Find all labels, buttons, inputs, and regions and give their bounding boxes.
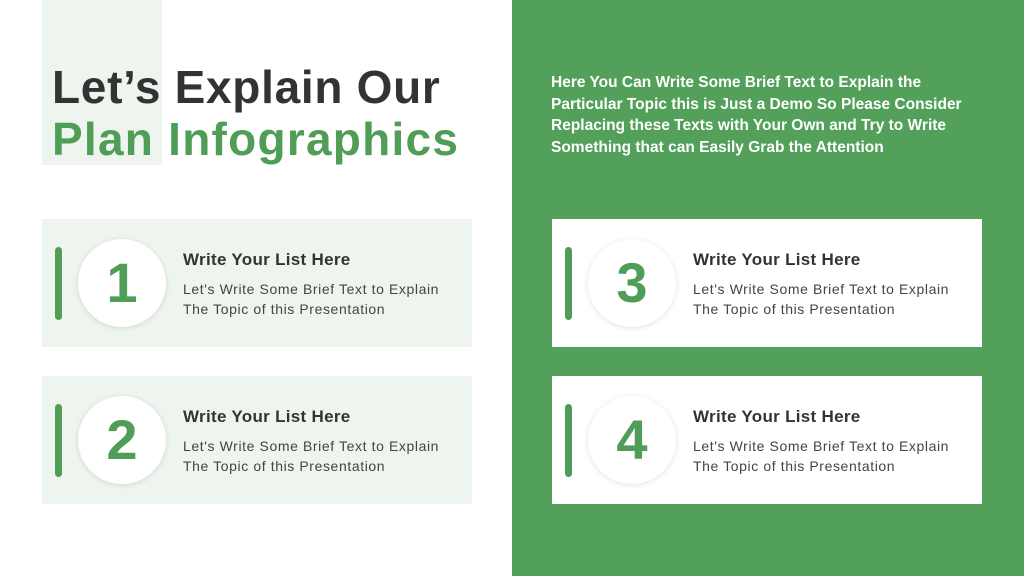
text 4: Let's Write Some Brief Text to Explain <box>693 438 949 454</box>
card 4 <box>552 376 982 504</box>
text 2: The Topic of this Presentation <box>183 458 385 474</box>
number 1 <box>78 239 166 327</box>
text 1: Let's Write Some Brief Text to Explain <box>183 281 439 297</box>
number 2: 2 <box>106 408 138 471</box>
heading 4: Write Your List Here <box>693 407 861 426</box>
number 3 <box>588 239 676 327</box>
heading 1: Write Your List Here <box>183 250 351 269</box>
intro text: Here You Can Write Some Brief Text to Explain the Particular Topic this is Just a Demo So Please Consider Replacing these Texts with Your Own and Try to Write Something that can Easily Grab the Attention <box>551 74 962 156</box>
heading 3: Write Your List Here <box>693 250 861 269</box>
heading 2: Write Your List Here <box>183 407 351 426</box>
text 1 <box>183 281 439 317</box>
green panel <box>512 0 1024 576</box>
title <box>52 61 459 165</box>
card 3 <box>552 219 982 347</box>
text 3: Let's Write Some Brief Text to Explain <box>693 281 949 297</box>
number 1: 1 <box>106 251 138 314</box>
text 4: The Topic of this Presentation <box>693 458 895 474</box>
card 1 <box>42 219 472 347</box>
text 4 <box>693 438 949 474</box>
text 3: The Topic of this Presentation <box>693 301 895 317</box>
number 4 <box>588 396 676 484</box>
number 3: 3 <box>616 251 648 314</box>
card 2 <box>42 376 472 504</box>
title: Plan Infographics <box>52 113 459 165</box>
text 3 <box>693 281 949 317</box>
number 4: 4 <box>616 408 648 471</box>
title: Let’s Explain Our <box>52 61 441 113</box>
text 2 <box>183 438 439 474</box>
text 2: Let's Write Some Brief Text to Explain <box>183 438 439 454</box>
decorative square <box>42 0 162 165</box>
number 2 <box>78 396 166 484</box>
text 1: The Topic of this Presentation <box>183 301 385 317</box>
